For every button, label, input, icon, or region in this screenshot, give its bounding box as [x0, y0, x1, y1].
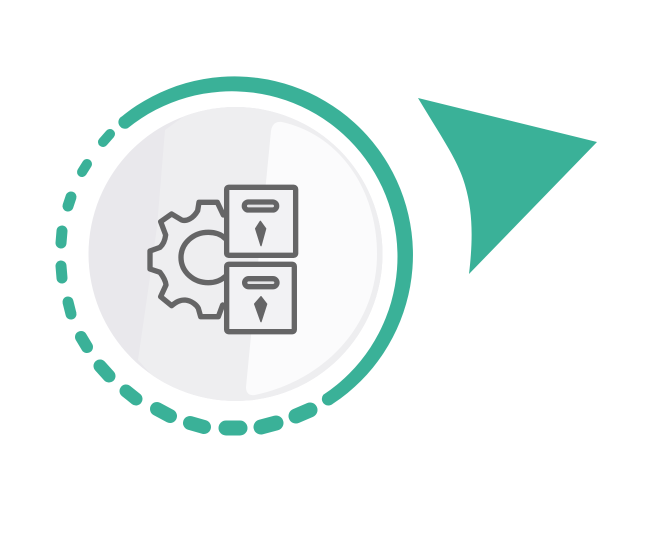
solid arc: [118, 76, 413, 406]
keyhole: [255, 297, 267, 322]
top box: [227, 187, 296, 255]
keyhole: [256, 221, 266, 246]
slot: [244, 202, 277, 210]
slot: [245, 279, 277, 287]
gear: [150, 202, 225, 317]
progress ring: [61, 76, 413, 428]
grey disc: [88, 107, 382, 401]
bottom box: [227, 264, 294, 332]
dashed arc: [61, 134, 310, 428]
infographic canvas: [56, 76, 597, 436]
arrow: teal triangle: [418, 98, 597, 274]
icon: gear with two boxes: [150, 187, 296, 332]
